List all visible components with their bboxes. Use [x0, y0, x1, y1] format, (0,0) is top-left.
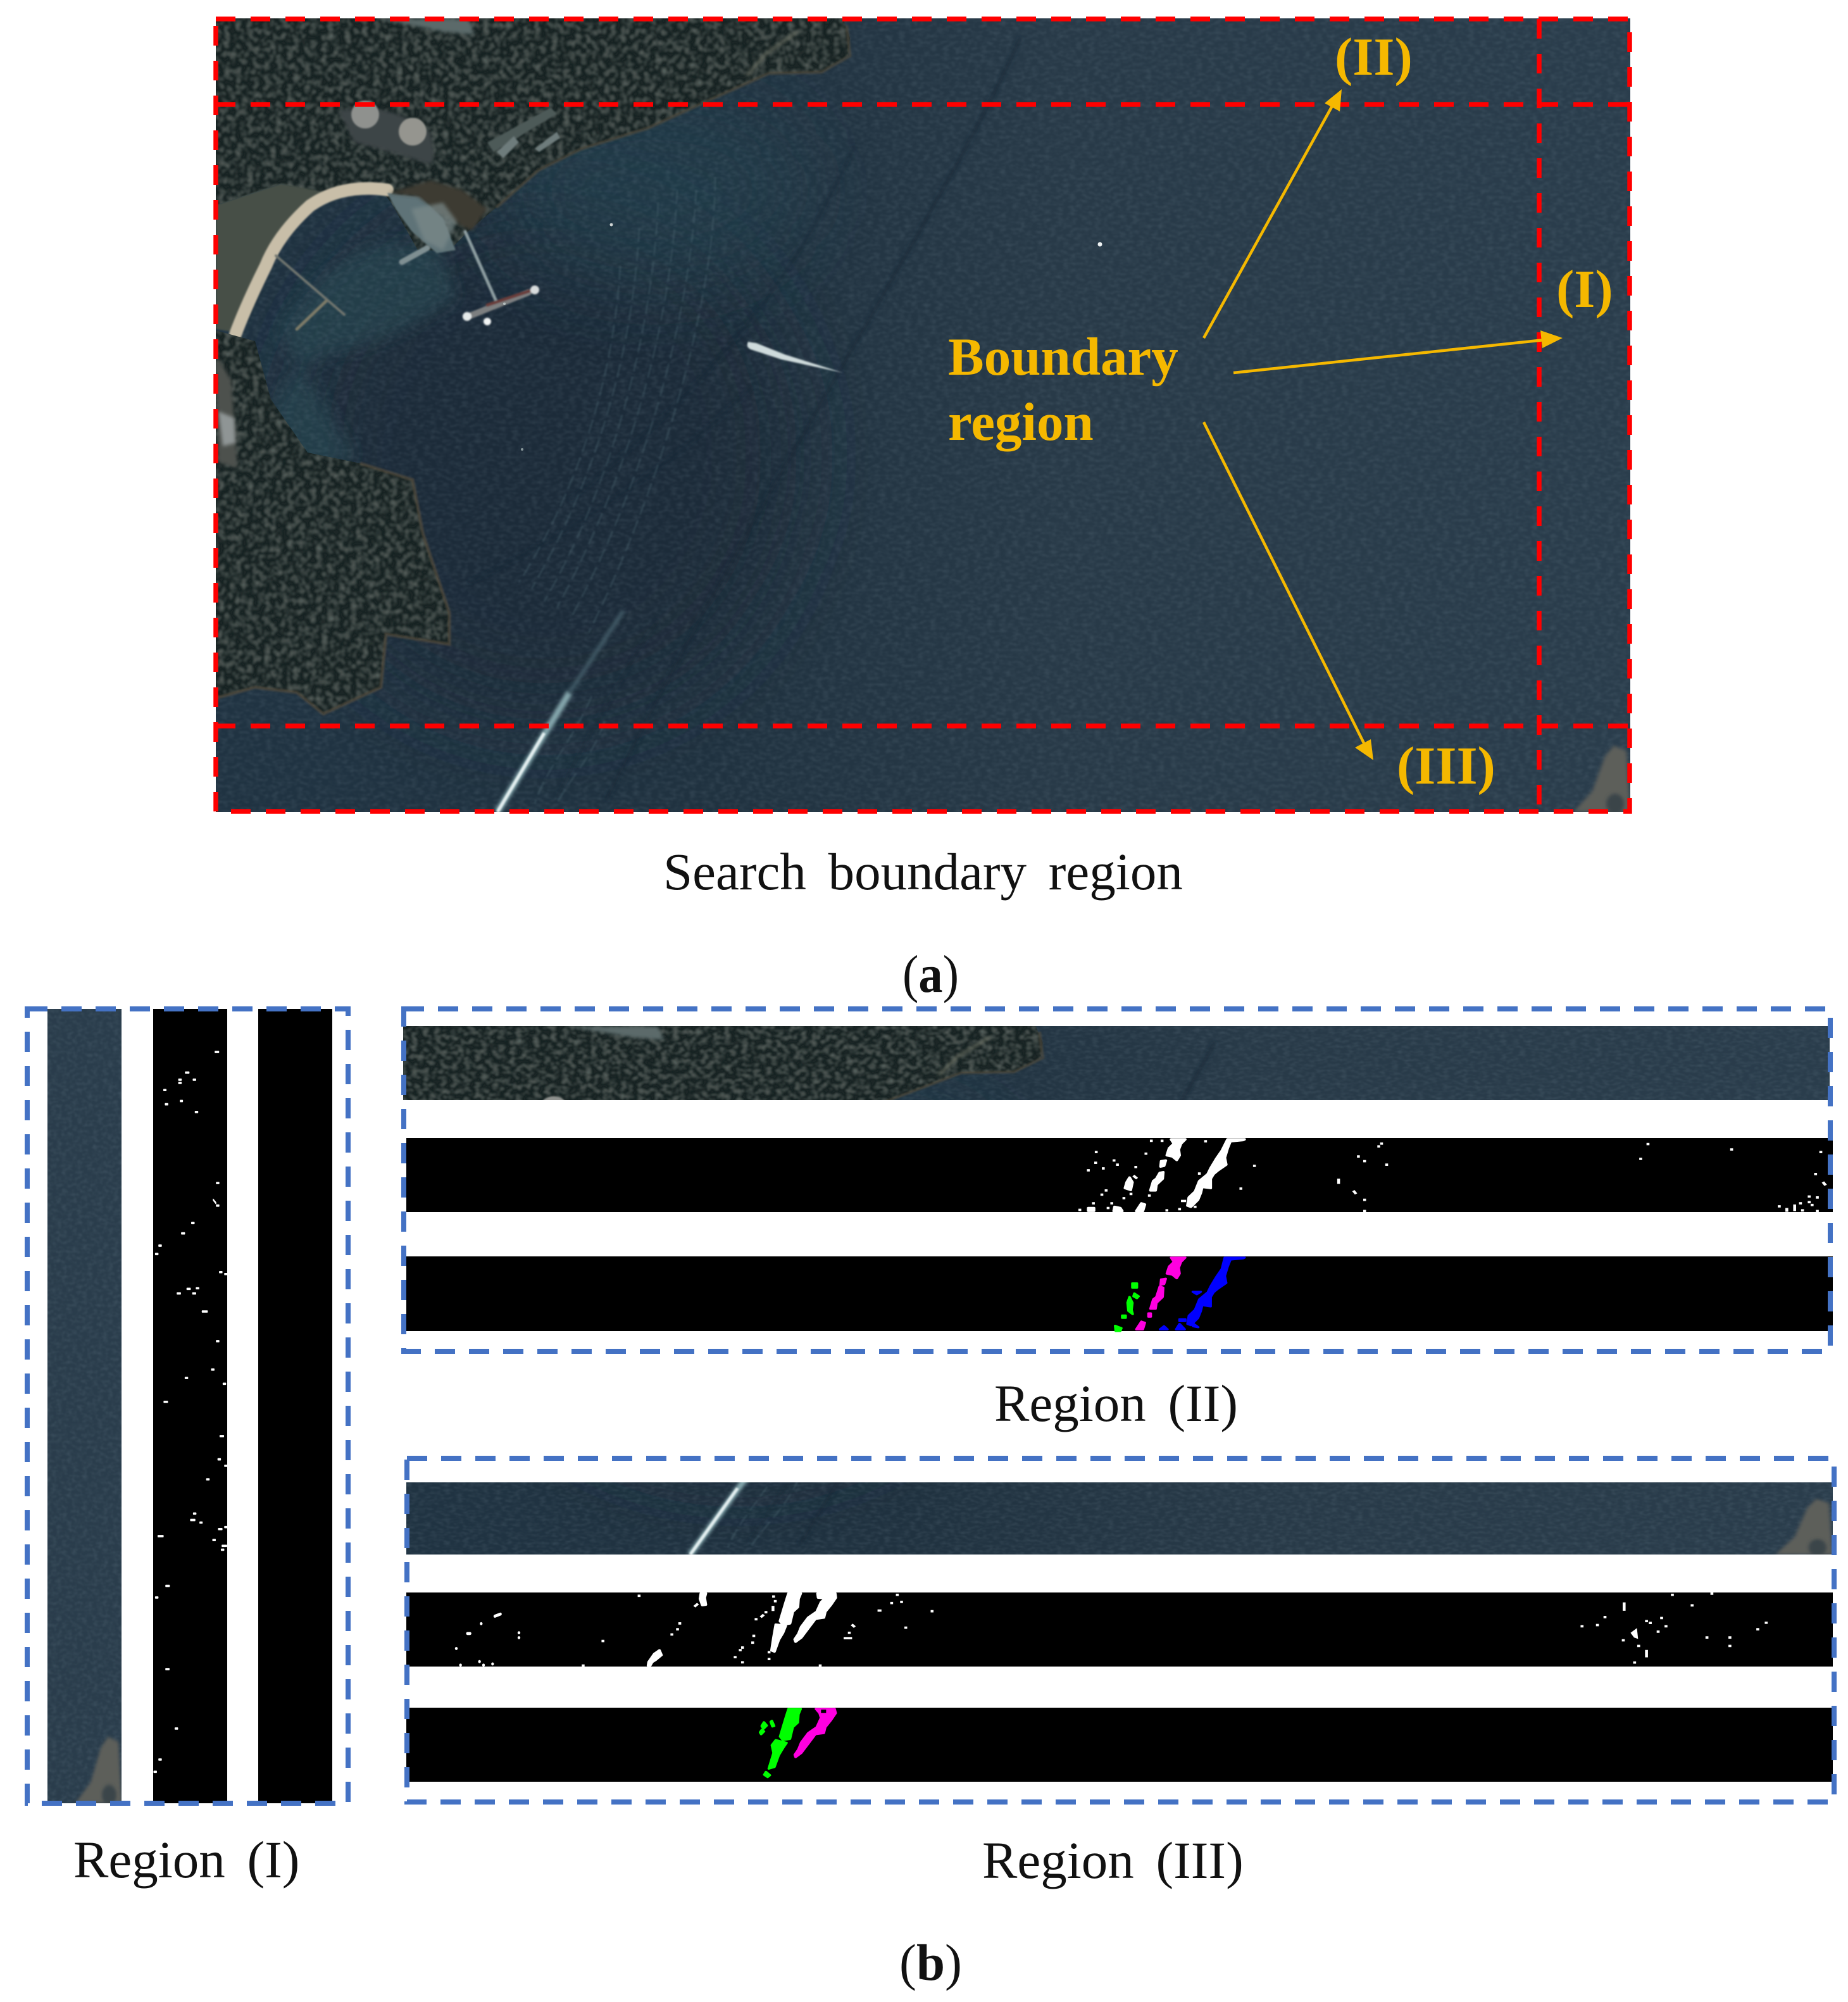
caption: search boundary region: Search boundary region [663, 842, 1183, 901]
region II detection mask [406, 1138, 1833, 1212]
arrow to region II [1204, 89, 1342, 338]
caption: region II: Region (II) [994, 1374, 1238, 1432]
region I segmentation result [258, 1009, 332, 1803]
region II dashed frame [404, 1009, 1830, 1351]
label III: (III) [1397, 736, 1495, 796]
arrow to region III [1204, 422, 1373, 760]
arrows [1204, 89, 1563, 760]
region I satellite column [47, 1009, 122, 1803]
panel label a: (a) [902, 945, 959, 1004]
hole in magenta cluster [821, 1710, 826, 1713]
label: boundary region [948, 327, 1178, 452]
region III dashed frame [407, 1458, 1834, 1802]
red dashed boundary bands [216, 19, 1630, 811]
green cluster [1115, 1284, 1139, 1331]
panel a: search boundary region [216, 18, 1630, 814]
region III detection mask [406, 1592, 1833, 1667]
panel: region III [406, 889, 1834, 1802]
blue cluster [1160, 1258, 1244, 1329]
region II satellite strip [403, 1026, 1830, 1100]
panel: region II [403, 1009, 1833, 1705]
magenta cluster [795, 1709, 836, 1757]
green cluster [760, 1709, 801, 1777]
caption: region III: Region (III) [982, 1831, 1244, 1889]
magenta cluster [1137, 1258, 1185, 1329]
region I dashed frame [27, 1009, 348, 1803]
label: boundary region: Boundary [948, 327, 1178, 387]
caption: region I: Region (I) [73, 1830, 299, 1889]
label I: (I) [1556, 260, 1613, 319]
panel: region I [0, 1009, 348, 1805]
label II: (II) [1335, 27, 1413, 87]
region III satellite strip [406, 1482, 1833, 1555]
arrow to region I [1233, 330, 1563, 373]
satellite image [216, 18, 1630, 814]
region III segmentation result [406, 1708, 1833, 1782]
label: boundary region: region [948, 392, 1094, 452]
region I detection mask [153, 1009, 227, 1803]
panel label b: (b) [899, 1934, 962, 1991]
region II segmentation result [406, 1256, 1833, 1331]
